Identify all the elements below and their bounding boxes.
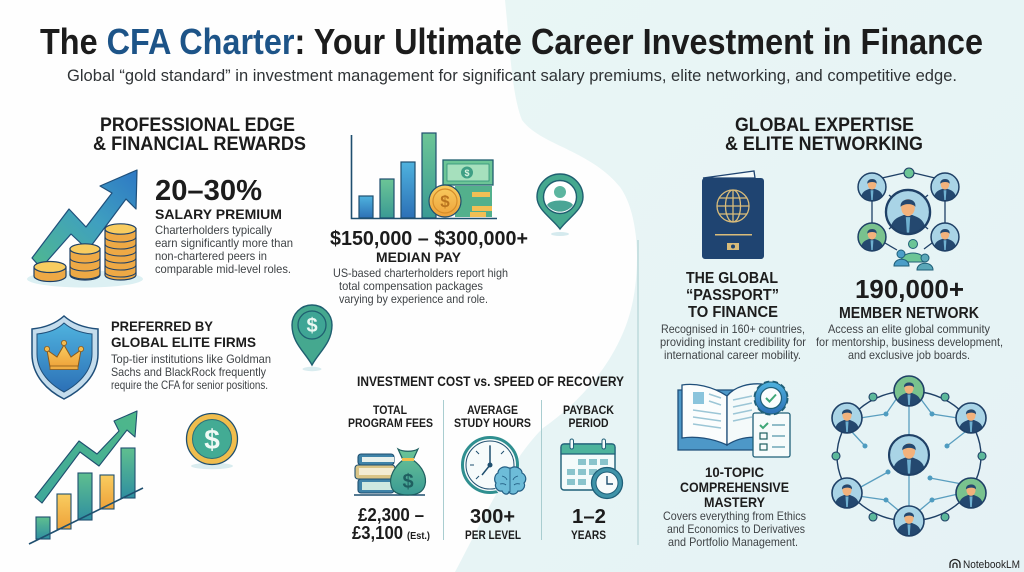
body: salary premium: non-chartered peers in: [155, 249, 267, 263]
body: salary premium: comparable mid-level roles.: [155, 262, 291, 276]
body: member network: and exclusive job boards.: [848, 348, 970, 362]
icon: calendar and clock: [561, 439, 622, 498]
stat: fees: £2,300 –: [358, 504, 424, 525]
label: salary premium: SALARY PREMIUM: [155, 206, 282, 222]
column heading: [454, 403, 531, 430]
body: global passport: [660, 322, 806, 362]
body: 10-topic mastery: and Portfolio Management.: [668, 535, 798, 549]
icon: growth bar chart with arrow: [29, 411, 143, 544]
icon: shield with crown: [32, 316, 98, 399]
body: preferred by firms: require the CFA for senior positions.: [111, 378, 268, 392]
column heading: PAYBACK: [563, 403, 614, 417]
panel: member network: [816, 168, 1003, 362]
body: member network: [816, 322, 1003, 362]
heading: 10-topic mastery: COMPREHENSIVE: [680, 479, 789, 495]
icon: books and money bag: $: [402, 471, 414, 493]
stat: payback: 1–2: [572, 506, 606, 528]
column heading: STUDY HOURS: [454, 416, 531, 430]
icon: clock and brain: [462, 438, 526, 498]
panel heading: professional edge: & FINANCIAL REWARDS: [93, 134, 306, 155]
panel heading: global expertise: GLOBAL EXPERTISE: [735, 115, 914, 136]
panel: comprehensive mastery: [663, 382, 806, 549]
icon: bar chart with cash and coin: $: [464, 168, 470, 178]
heading: preferred by global elite firms: GLOBAL ELITE FIRMS: [111, 334, 256, 350]
heading: global passport: TO FINANCE: [688, 304, 778, 321]
column: total program fees: [348, 403, 433, 543]
body: median pay: total compensation packages: [339, 279, 483, 293]
divider: [637, 240, 639, 545]
body: preferred by firms: Sachs and BlackRock frequently: [111, 365, 266, 379]
body: salary premium: earn significantly more than: [155, 236, 293, 250]
column heading: TOTAL: [373, 403, 407, 417]
icon: member network diagram: [858, 168, 959, 270]
label: per level: PER LEVEL: [465, 528, 521, 542]
column heading: [348, 403, 433, 430]
icon: bar chart with cash and coin: [352, 133, 497, 218]
label: member network: MEMBER NETWORK: [839, 305, 979, 322]
icon: rising arrow with coins: [27, 170, 143, 288]
icon: bar chart with cash and coin: $: [440, 192, 450, 211]
body: global passport: providing instant credibility for: [660, 335, 806, 349]
column heading: AVERAGE: [467, 403, 518, 417]
label: median pay: MEDIAN PAY: [376, 249, 462, 265]
icon: person location pin: [537, 174, 583, 236]
heading: global passport: THE GLOBAL: [686, 270, 778, 287]
panel heading: professional edge: [93, 115, 306, 155]
column: average study hours: [454, 403, 531, 542]
body: preferred by firms: [111, 352, 271, 392]
stat: 190,000+: 190,000+: [855, 274, 964, 304]
column: payback period: [561, 403, 622, 542]
panel heading: global expertise: & ELITE NETWORKING: [725, 134, 923, 155]
body: global passport: Recognised in 160+ countries,: [661, 322, 805, 336]
column heading: PROGRAM FEES: [348, 416, 433, 430]
body: 10-topic mastery: [663, 509, 806, 549]
icon: global network ring: [832, 376, 986, 536]
heading: 10-topic mastery: 10-TOPIC: [705, 464, 764, 480]
heading: 10-topic mastery: MASTERY: [704, 494, 766, 510]
heading: preferred by global elite firms: PREFERRED BY: [111, 318, 214, 334]
panel heading: professional edge: PROFESSIONAL EDGE: [100, 115, 295, 136]
icon: dollar location pin: [292, 305, 332, 371]
heading: investment cost: INVESTMENT COST vs. SPEED OF RECOVERY: [357, 374, 624, 389]
panel: preferred by elite firms: [32, 316, 271, 399]
body: 10-topic mastery: and Economics to Derivatives: [667, 522, 805, 536]
stat: fees: (Est.): [407, 531, 430, 542]
heading: global passport: “PASSPORT”: [686, 287, 779, 304]
icon: passport: [702, 171, 764, 259]
body: salary premium: Charterholders typically: [155, 223, 272, 237]
panel: median pay: [330, 133, 528, 306]
label: years: YEARS: [571, 528, 606, 542]
logo: NotebookLM: NotebookLM: [963, 559, 1020, 571]
body: member network: for mentorship, business development,: [816, 335, 1003, 349]
subtitle: Global “gold standard” in investment management for significant salary premiums, elite networking, and competitive edge.: [67, 67, 957, 85]
panel: investment cost vs speed of recovery: [348, 374, 624, 543]
panel heading: global expertise: [725, 115, 923, 155]
body: median pay: varying by experience and role.: [339, 292, 488, 306]
icon: dollar coin: $: [204, 424, 220, 455]
icon: dollar coin: [186, 414, 238, 469]
stat: fees: £3,100: [352, 522, 403, 543]
heading: 10-topic mastery: [680, 464, 789, 510]
panel: global passport: [660, 171, 806, 362]
body: median pay: US-based charterholders report high: [333, 266, 508, 280]
stat: study hours: 300+: [470, 506, 515, 528]
stat: 20–30%: 20–30%: [155, 175, 262, 207]
icon: dollar location pin: $: [306, 315, 318, 337]
body: median pay: [333, 266, 508, 306]
background blob: [455, 0, 1024, 572]
column heading: [563, 403, 614, 430]
stat: median pay range: $150,000 – $300,000+: [330, 228, 528, 250]
body: global passport: international career mobility.: [664, 348, 801, 362]
panel: salary premium: [27, 170, 293, 288]
stat: fees: [352, 504, 430, 543]
body: member network: Access an elite global community: [828, 322, 990, 336]
divider: [444, 400, 542, 540]
column heading: PERIOD: [568, 416, 609, 430]
heading: global passport: [686, 270, 779, 321]
heading: preferred by global elite firms: [111, 318, 256, 350]
icon: open book, gear and checklist: [678, 382, 790, 457]
body: 10-topic mastery: Covers everything from Ethics: [663, 509, 806, 523]
body: preferred by firms: Top-tier institutions like Goldman: [111, 352, 271, 366]
body: salary premium: [155, 223, 293, 276]
